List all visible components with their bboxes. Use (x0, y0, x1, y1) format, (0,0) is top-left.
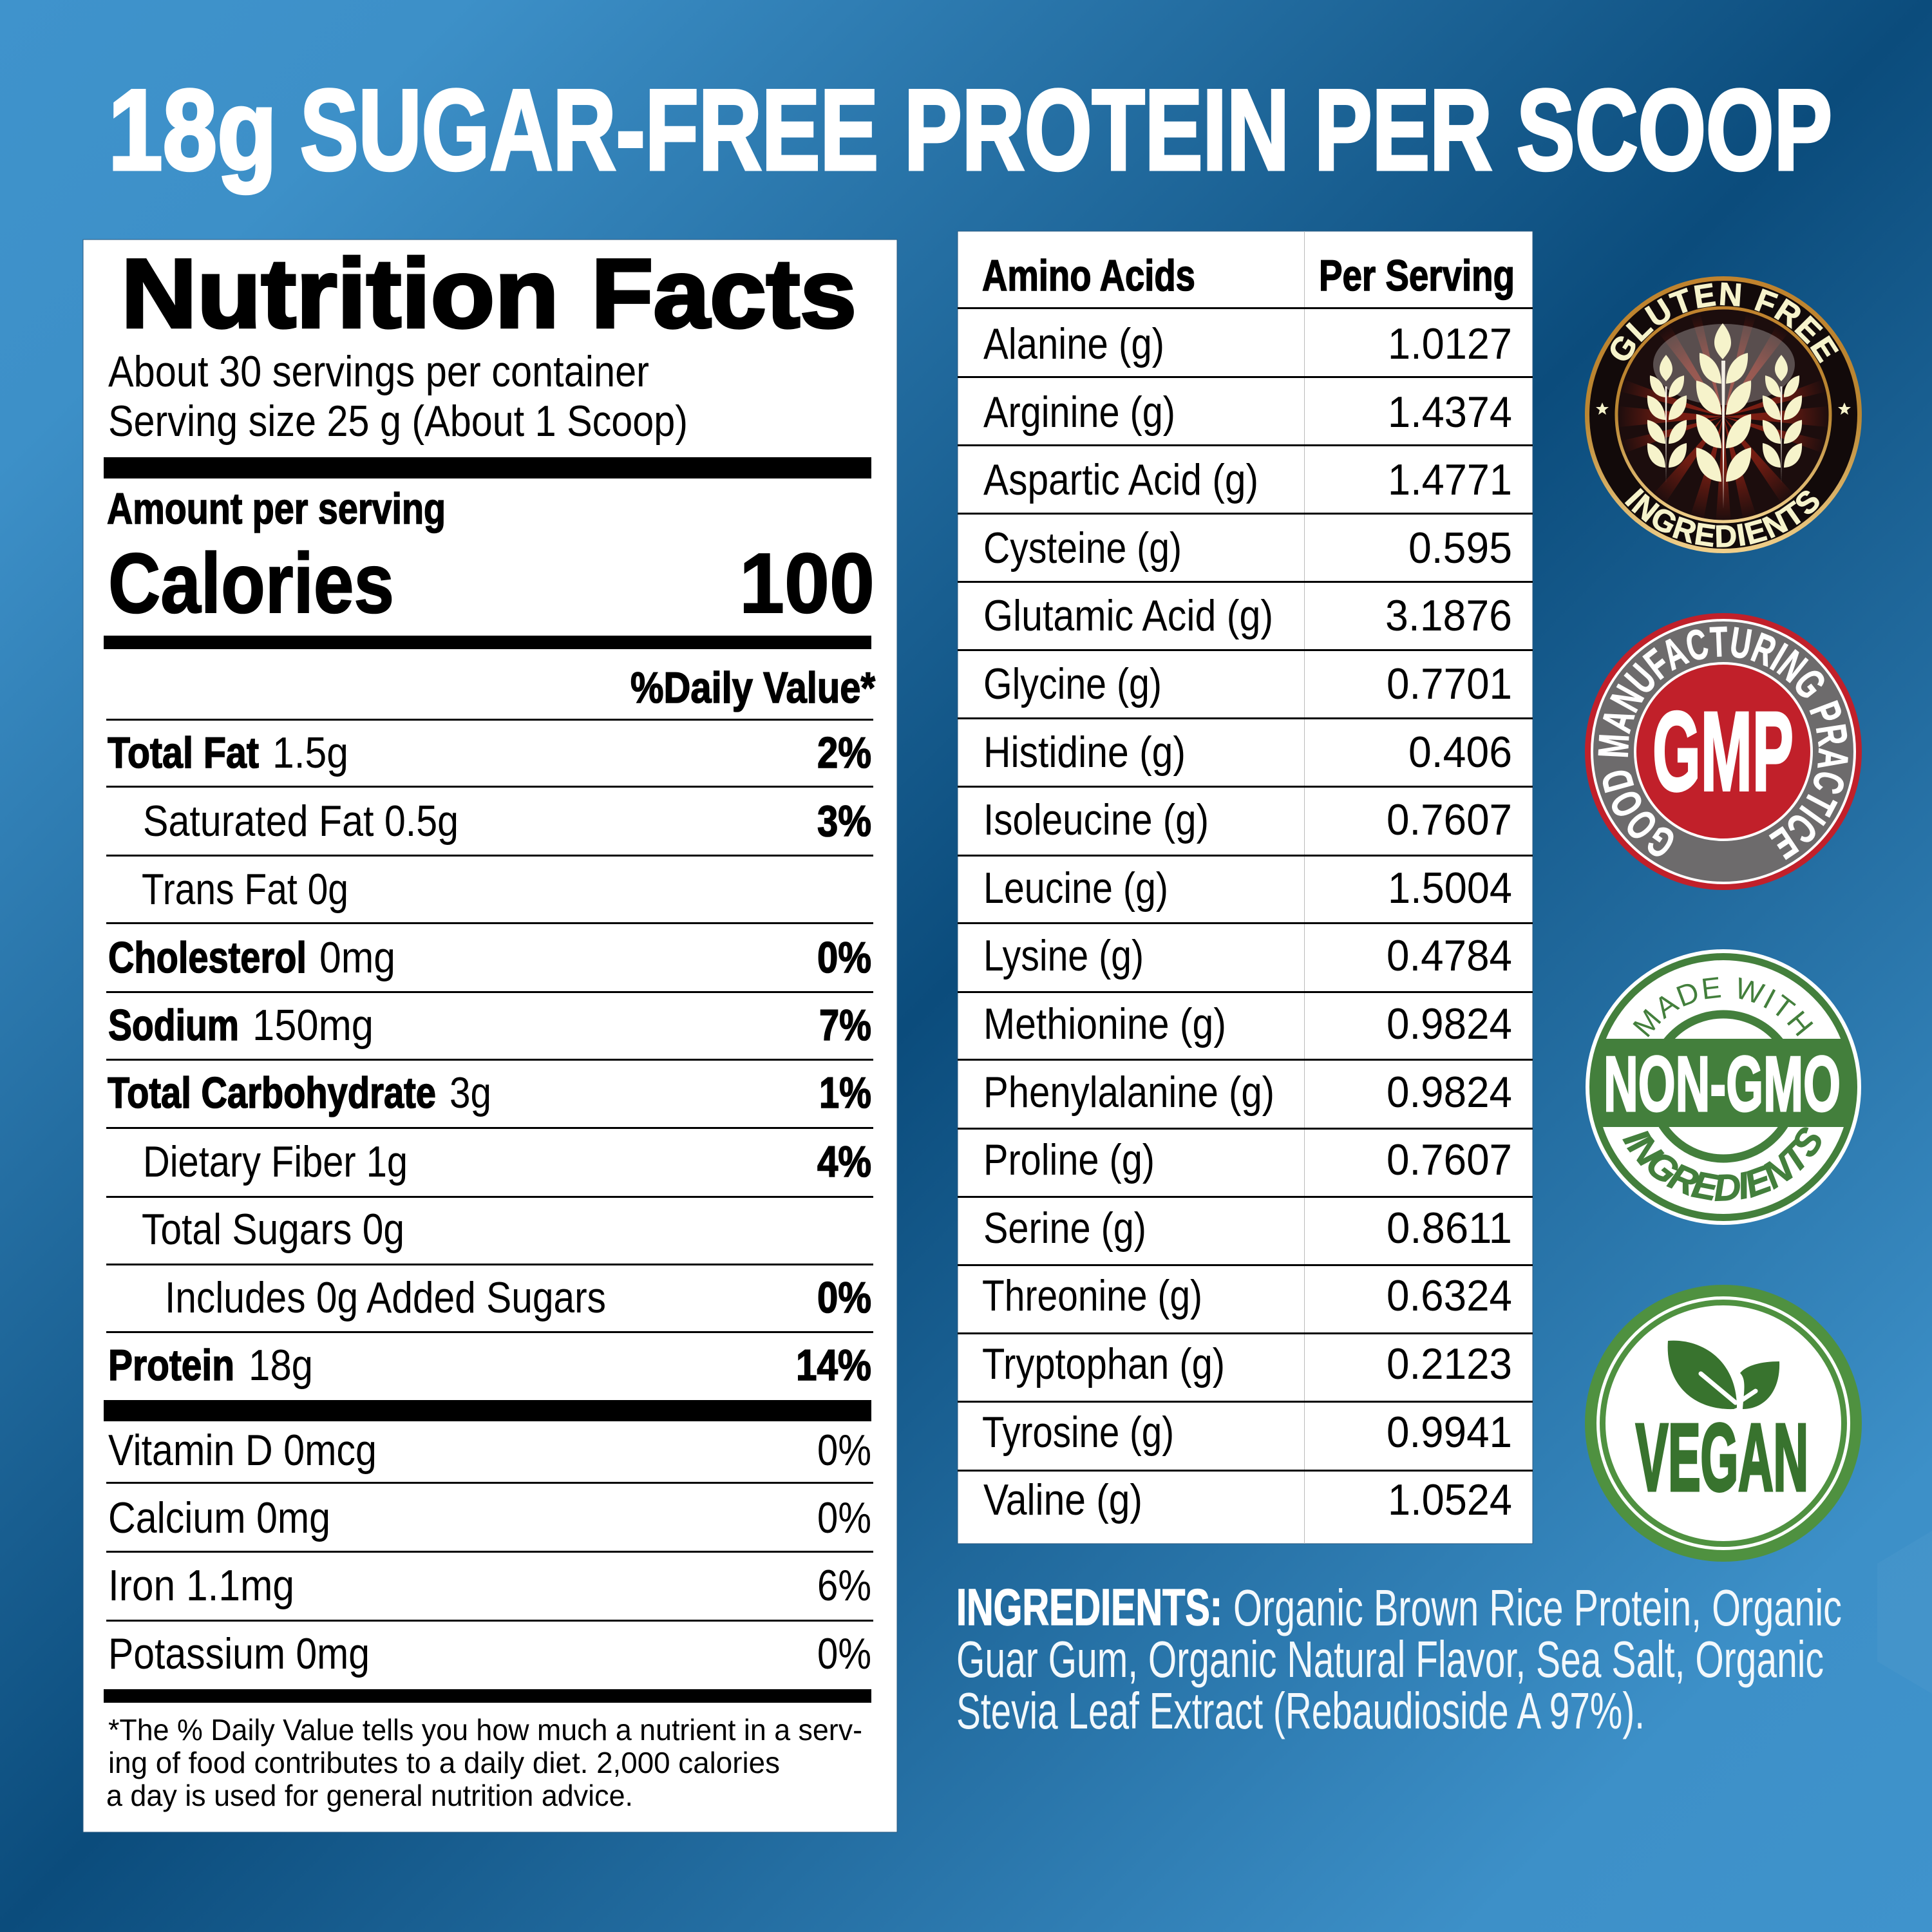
text block: ingredients (956, 1578, 1842, 1739)
row: cysteine: 0.595 (1408, 524, 1512, 573)
icon: wheat stalks (1647, 323, 1802, 509)
row: methionine: Methionine (g) (983, 999, 1226, 1048)
row: serine (983, 1204, 1512, 1253)
row: total fat (108, 728, 871, 777)
badge text: ingredients: INGREDIENTS (1624, 488, 1819, 547)
row: tryptophan: 0.2123 (1387, 1340, 1512, 1388)
row: isoleucine (983, 795, 1512, 844)
row: glycine: 0.7701 (1387, 659, 1512, 708)
row: sodium (108, 1001, 871, 1050)
icon: leaves (1668, 1341, 1779, 1409)
heading: nutrition facts: Nutrition (121, 239, 559, 348)
row: vitamin d: 0% (817, 1426, 871, 1475)
text block: ingredients: INGREDIENTS: (956, 1578, 1222, 1636)
row: histidine (983, 728, 1512, 777)
badge: gluten free (1585, 276, 1862, 553)
text: servings: Serving size 25 g (About 1 Scoop) (108, 397, 688, 446)
row: protein (108, 1341, 871, 1390)
row: calcium (108, 1493, 871, 1542)
text: servings: About 30 servings per container (108, 347, 649, 396)
row: methionine: 0.9824 (1387, 999, 1512, 1048)
row: alanine: Alanine (g) (983, 319, 1164, 368)
row: calcium: Calcium 0mg (108, 1493, 330, 1542)
panel: nutrition facts (83, 239, 897, 1832)
row: glycine: Glycine (g) (983, 659, 1162, 708)
row: tyrosine: 0.9941 (1387, 1408, 1512, 1457)
text: daily value header: %Daily Value* (630, 663, 875, 712)
row: proline: 0.7607 (1387, 1135, 1512, 1184)
row: lysine: 0.4784 (1387, 931, 1512, 980)
row: threonine: 0.6324 (1387, 1271, 1512, 1320)
row: calcium: 0% (817, 1493, 871, 1542)
row: glutamic acid: 3.1876 (1385, 591, 1512, 640)
badge text: GMP: GMP (1653, 689, 1794, 815)
title: SUGAR-FREE (300, 66, 878, 194)
row: cysteine (983, 524, 1512, 573)
row: iron (108, 1561, 871, 1610)
row: serine: 0.8611 (1387, 1204, 1512, 1253)
heading: nutrition facts (121, 239, 857, 348)
row: cholesterol: 0% (817, 933, 871, 982)
row: lysine: Lysine (g) (983, 931, 1144, 980)
row: total carbohydrate (108, 1068, 871, 1117)
row: isoleucine: 0.7607 (1387, 795, 1512, 844)
row: proline: Proline (g) (983, 1135, 1155, 1184)
row: glycine (983, 659, 1512, 708)
row: vitamin d: Vitamin D 0mcg (108, 1426, 377, 1475)
row: cysteine: Cysteine (g) (983, 524, 1182, 573)
panel: amino acids table (958, 231, 1533, 1544)
row: valine: 1.0524 (1388, 1475, 1512, 1524)
badge text: ingredients: INGREDIENTS (1622, 1127, 1821, 1202)
row: iron: 6% (817, 1561, 871, 1610)
row: dietary fiber (143, 1137, 871, 1186)
row: total sugars: Total Sugars 0g (142, 1205, 404, 1254)
row: proline (983, 1135, 1512, 1184)
badge text: good manufacturing practice: GOOD MANUFACTURING PRACTICE (1598, 626, 1848, 860)
row: cholesterol: Cholesterol (108, 933, 307, 982)
row: sodium: 7% (819, 1001, 871, 1050)
row: cholesterol (108, 933, 871, 982)
row: added sugars: Includes 0g Added Sugars (165, 1273, 606, 1322)
row: saturated fat: Saturated Fat 0.5g (143, 797, 459, 846)
row: trans fat: Trans Fat 0g (142, 865, 348, 914)
footnote: *The % Daily Value tells you how much a nutrient in a serv- (108, 1713, 862, 1747)
row: glutamic acid: Glutamic Acid (g) (983, 591, 1273, 640)
row: total fat: 2% (817, 728, 871, 777)
table header: Amino Acids (982, 251, 1195, 300)
row: serine: Serine (g) (983, 1204, 1146, 1253)
footnote: a day is used for general nutrition advice. (106, 1779, 633, 1812)
footnote (106, 1713, 862, 1812)
calories row (108, 536, 875, 630)
badge: non-GMO (1586, 949, 1861, 1225)
row: glutamic acid (983, 591, 1512, 640)
row: dietary fiber: 4% (817, 1137, 871, 1186)
row: protein: Protein (108, 1341, 234, 1390)
row: phenylalanine: 0.9824 (1387, 1068, 1512, 1117)
row: tyrosine: Tyrosine (g) (982, 1408, 1174, 1457)
row: saturated fat (143, 797, 871, 846)
row: methionine (983, 999, 1512, 1048)
row: total carbohydrate: 1% (819, 1068, 871, 1117)
row: sodium: 150mg (252, 1001, 374, 1050)
badge text: gluten free: GLUTEN FREE (1610, 282, 1839, 363)
row: potassium: Potassium 0mg (108, 1629, 370, 1678)
calories row: Calories (108, 536, 394, 630)
row: histidine: Histidine (g) (983, 728, 1186, 777)
row: arginine: Arginine (g) (983, 388, 1175, 437)
row: tyrosine (982, 1408, 1512, 1457)
row: isoleucine: Isoleucine (g) (983, 795, 1209, 844)
row: potassium: 0% (817, 1629, 871, 1678)
row: protein: 14% (796, 1341, 871, 1390)
footnote: ing of food contributes to a daily diet. 2,000 calories (108, 1746, 780, 1779)
row: saturated fat: 3% (817, 797, 871, 846)
row: arginine: 1.4374 (1388, 388, 1512, 437)
row: phenylalanine: Phenylalanine (g) (983, 1068, 1274, 1117)
row: aspartic acid: Aspartic Acid (g) (983, 455, 1258, 504)
calories row: 100 (739, 536, 875, 630)
title (108, 66, 1832, 194)
badge: vegan (1585, 1285, 1862, 1562)
row: tryptophan: Tryptophan (g) (982, 1340, 1225, 1388)
title: PER (1314, 66, 1492, 194)
row: valine (983, 1475, 1512, 1524)
row: cholesterol: 0mg (319, 933, 395, 982)
row: aspartic acid: 1.4771 (1388, 455, 1512, 504)
row: total fat: Total Fat (108, 728, 259, 777)
row: total carbohydrate: 3g (450, 1068, 491, 1117)
table header: Per Serving (1319, 251, 1515, 300)
row: total carbohydrate: Total Carbohydrate (108, 1068, 436, 1117)
row: protein: 18g (249, 1341, 313, 1390)
row: histidine: 0.406 (1408, 728, 1512, 777)
row: vitamin d (108, 1426, 871, 1475)
row: threonine (982, 1271, 1512, 1320)
badge text: made with: MADE WITH (1633, 977, 1814, 1037)
text: servings (108, 347, 688, 446)
text block: ingredients: Stevia Leaf Extract (Rebaudioside A 97%). (956, 1682, 1645, 1739)
row: leucine: 1.5004 (1388, 864, 1512, 913)
table header (982, 251, 1515, 300)
text: amount per serving: Amount per serving (107, 484, 446, 533)
row: tryptophan (982, 1340, 1512, 1388)
heading: nutrition facts: Facts (591, 239, 857, 348)
row: alanine (983, 319, 1512, 368)
row: added sugars: 0% (817, 1273, 871, 1322)
row: leucine: Leucine (g) (983, 864, 1168, 913)
row: dietary fiber: Dietary Fiber 1g (143, 1137, 408, 1186)
row: arginine (983, 388, 1512, 437)
row: total fat: 1.5g (272, 728, 348, 777)
row: lysine (983, 931, 1512, 980)
row: phenylalanine (983, 1068, 1512, 1117)
title: 18g (108, 66, 277, 194)
badge: GMP (1585, 613, 1862, 890)
row: sodium: Sodium (108, 1001, 239, 1050)
row: threonine: Threonine (g) (982, 1271, 1202, 1320)
row: aspartic acid (983, 455, 1512, 504)
icon: stars (1596, 402, 1851, 415)
title: PROTEIN (904, 66, 1289, 194)
title: SCOOP (1517, 66, 1832, 194)
row: potassium (108, 1629, 871, 1678)
row: iron: Iron 1.1mg (108, 1561, 294, 1610)
row: valine: Valine (g) (983, 1475, 1142, 1524)
row: alanine: 1.0127 (1388, 319, 1512, 368)
row: leucine (983, 864, 1512, 913)
